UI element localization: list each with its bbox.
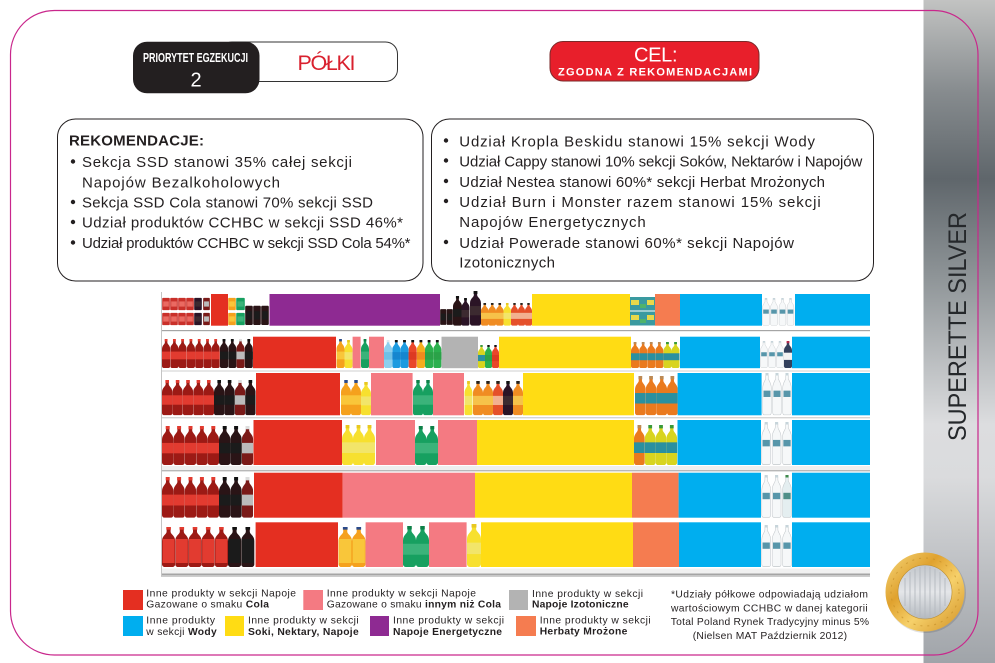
panel: brand share targets bbox=[432, 119, 874, 281]
legend: isotonic: Napoje Izotoniczne bbox=[532, 600, 629, 611]
panel: recommendations bbox=[58, 119, 423, 281]
shelves outline pill bbox=[220, 42, 398, 82]
targets bullets: Udział Kropla Beskidu stanowi 15% sekcji Wody bbox=[459, 133, 816, 150]
planogram: shelves bbox=[161, 291, 870, 577]
shelf 6 products bbox=[162, 524, 791, 567]
shelf 2 colour blocks bbox=[253, 337, 870, 368]
recommendations bullets bbox=[71, 154, 411, 252]
icon: bimetal coin bbox=[886, 552, 966, 633]
recommendations bullets: Udział produktów CCHBC w sekcji SSD Cola 54%* bbox=[82, 235, 411, 252]
footnote: *Udziały półkowe odpowiadają udziałom bbox=[671, 589, 868, 600]
targets bullets: Udział Powerade stanowi 60%* sekcji Napojów bbox=[459, 235, 794, 252]
shelf 1 colour blocks bbox=[211, 294, 870, 326]
shelf 2 bbox=[162, 337, 870, 368]
legend: iced tea: Herbaty Mrożone bbox=[540, 627, 628, 638]
footnote: wartościowym CCHBC w danej kategorii bbox=[670, 604, 868, 615]
legend: water: w sekcji Wody bbox=[145, 627, 217, 638]
shelf 3 products bbox=[162, 373, 791, 415]
recommendations bullets: Napojów Bezalkoholowych bbox=[82, 175, 280, 192]
targets bullets: Udział Cappy stanowi 10% sekcji Soków, Nektarów i Napojów bbox=[459, 153, 862, 170]
legend: energy drinks: Inne produkty w sekcji bbox=[393, 615, 504, 626]
legend: non-Cola bbox=[303, 589, 501, 611]
targets bullets: Izotonicznych bbox=[459, 255, 555, 272]
shelf 4 bbox=[162, 420, 870, 465]
red pill bbox=[550, 42, 759, 81]
legend: Cola bbox=[123, 589, 296, 611]
targets bullets: Udział Nestea stanowi 60%* sekcji Herbat Mrożonych bbox=[459, 174, 825, 191]
shelves heading: PÓŁKI bbox=[298, 50, 356, 75]
footnote: Total Poland Rynek Tradycyjny minus 5% bbox=[671, 617, 869, 628]
shelf 1 products bbox=[162, 291, 794, 326]
silver side strip bbox=[924, 0, 995, 663]
legend: juices bbox=[225, 615, 359, 638]
shelf 5 products bbox=[162, 475, 791, 518]
targets bullets bbox=[444, 133, 862, 272]
recommendations frame bbox=[58, 119, 423, 281]
shelf 1 bbox=[162, 291, 870, 326]
targets bullets: Napojów Energetycznych bbox=[459, 214, 646, 231]
priority label: PRIORYTET EGZEKUCJI bbox=[143, 51, 248, 65]
legend: non-Cola: Inne produkty w sekcji Napoje bbox=[327, 589, 476, 600]
legend: isotonic bbox=[509, 589, 643, 611]
shelf 5 colour blocks bbox=[254, 473, 870, 518]
legend: iced tea: Inne produkty w sekcji bbox=[540, 615, 651, 626]
recommendations heading: REKOMENDACJE: bbox=[69, 132, 204, 149]
legend: Cola: Gazowane o smaku Cola bbox=[146, 600, 269, 611]
recommendations bullets: Sekcja SSD stanowi 35% całej sekcji bbox=[82, 154, 352, 171]
shelf 5 bbox=[162, 473, 870, 518]
legend: isotonic: Inne produkty w sekcji bbox=[532, 589, 643, 600]
goal heading: CEL: bbox=[634, 45, 678, 67]
targets frame bbox=[432, 119, 874, 281]
recommendations bullets: Udział produktów CCHBC w sekcji SSD 46%* bbox=[82, 215, 403, 232]
shelf 4 colour blocks bbox=[254, 420, 870, 465]
shelf 3 bbox=[162, 373, 870, 415]
footnote: (Nielsen MAT Październik 2012) bbox=[693, 631, 847, 642]
side label: Superette Silver: SUPERETTE SILVER bbox=[944, 212, 972, 441]
shelf 6 bbox=[162, 522, 870, 567]
priority badge: Półki bbox=[133, 42, 398, 93]
targets bullets: Udział Burn i Monster razem stanowi 15% sekcji bbox=[459, 194, 821, 211]
shelf 4 products bbox=[162, 422, 791, 465]
footnote bbox=[670, 589, 869, 642]
legend: energy drinks: Napoje Energetyczne bbox=[393, 627, 502, 638]
priority black tab bbox=[133, 42, 260, 93]
legend: water bbox=[123, 615, 217, 638]
goal subheading: ZGODNA Z REKOMENDACJAMI bbox=[558, 67, 752, 79]
shelf 3 colour blocks bbox=[256, 373, 870, 415]
legend: juices: Soki, Nektary, Napoje bbox=[248, 627, 359, 638]
recommendations bullets: Sekcja SSD Cola stanowi 70% sekcji SSD bbox=[82, 195, 373, 212]
legend: energy drinks bbox=[370, 615, 504, 638]
goal badge bbox=[550, 42, 759, 81]
legend: juices: Inne produkty w sekcji bbox=[248, 615, 359, 626]
legend: Cola: Inne produkty w sekcji Napoje bbox=[146, 589, 296, 600]
legend: non-Cola: Gazowane o smaku innym niż Cola bbox=[327, 600, 501, 611]
legend: water: Inne produkty bbox=[146, 615, 216, 626]
legend bbox=[123, 589, 651, 638]
shelf 6 colour blocks bbox=[256, 522, 870, 567]
shelf 2 products bbox=[162, 339, 792, 368]
priority number: 2 bbox=[190, 70, 202, 92]
legend: iced tea bbox=[516, 615, 651, 638]
